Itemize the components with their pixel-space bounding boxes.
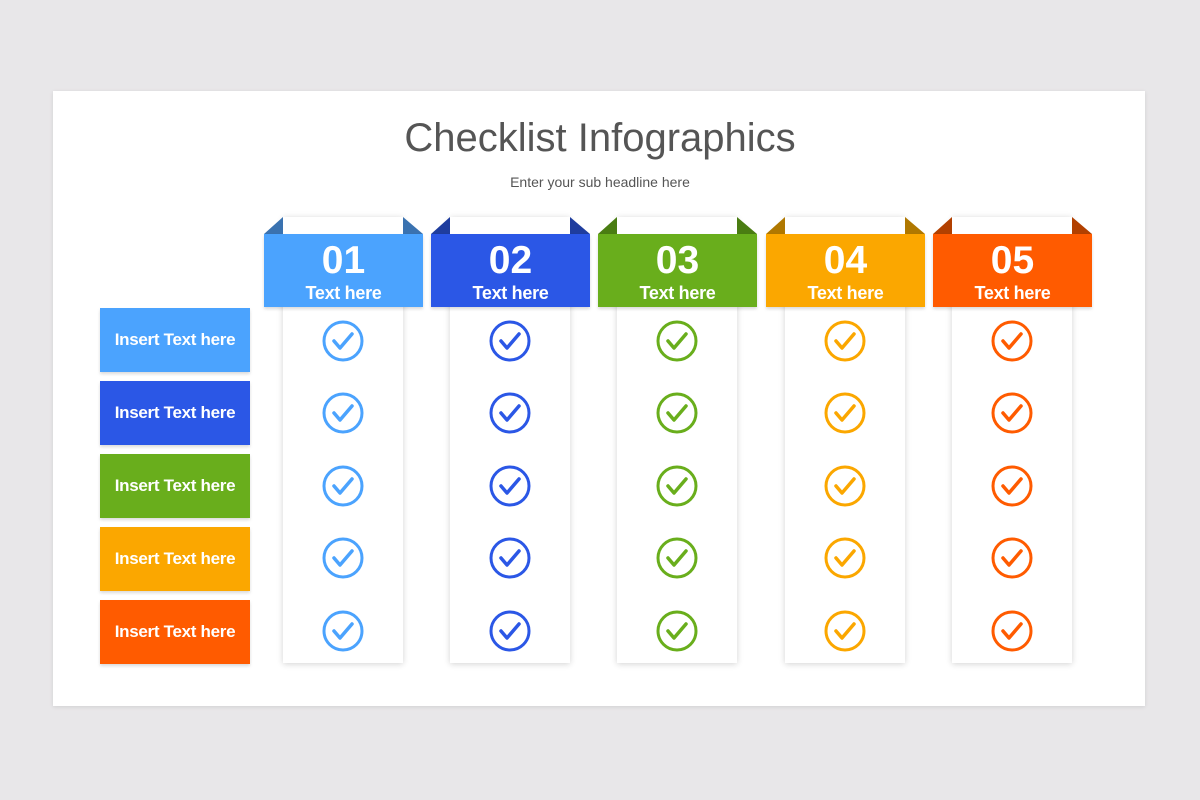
column 5	[952, 217, 1072, 663]
column 1	[283, 217, 403, 663]
card background	[53, 91, 1145, 706]
row label 3: Insert Text here	[115, 476, 235, 495]
header 02: 02	[489, 239, 532, 282]
row label 2: Insert Text here	[115, 403, 235, 422]
header 01	[264, 234, 423, 307]
header 01: Text here	[306, 283, 382, 303]
header 05: Text here	[974, 283, 1050, 303]
header 03	[598, 234, 757, 307]
column 4	[785, 217, 905, 663]
header 02	[431, 234, 590, 307]
row label 1	[100, 308, 250, 372]
column 3	[617, 217, 737, 663]
header 03: 03	[656, 239, 699, 282]
title: Checklist Infographics	[404, 116, 796, 160]
header 05: 05	[991, 239, 1034, 282]
column 2	[450, 217, 570, 663]
row label 4: Insert Text here	[115, 549, 235, 568]
header 03: Text here	[640, 283, 716, 303]
row label 5: Insert Text here	[115, 622, 235, 641]
header 02: Text here	[472, 283, 548, 303]
subtitle: Enter your sub headline here	[510, 174, 690, 190]
row label 1: Insert Text here	[115, 330, 235, 349]
row label 3	[100, 454, 250, 518]
header 05	[933, 234, 1092, 307]
row label 4	[100, 527, 250, 591]
header 04: Text here	[808, 283, 884, 303]
row label 5	[100, 600, 250, 664]
row label 2	[100, 381, 250, 445]
header 04	[766, 234, 925, 307]
header 04: 04	[824, 239, 867, 282]
header 01: 01	[322, 239, 365, 282]
